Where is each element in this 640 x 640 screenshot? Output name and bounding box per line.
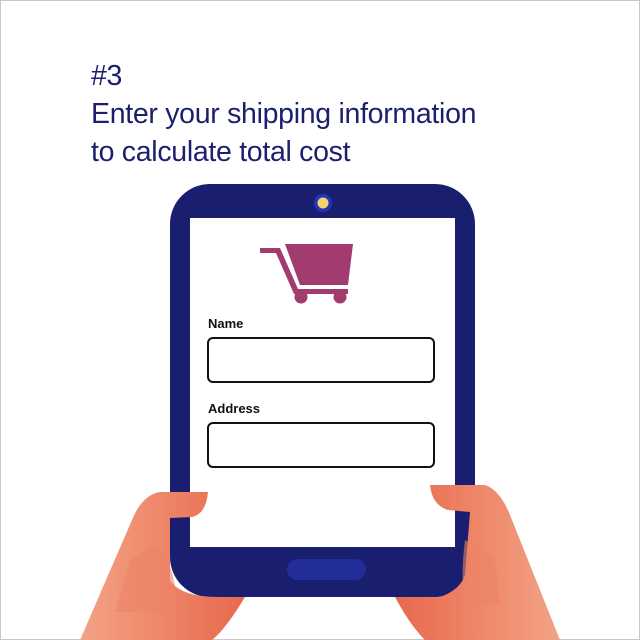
- title: Enter your shipping information: [91, 98, 476, 130]
- title: [91, 60, 476, 168]
- title: #3: [91, 60, 122, 92]
- form: address label: Address: [208, 401, 260, 416]
- title: to calculate total cost: [91, 136, 350, 168]
- form: address input: [207, 422, 435, 468]
- icon: shopping cart: [260, 244, 353, 304]
- tablet body: [170, 184, 475, 597]
- right hand: [395, 485, 560, 640]
- form: name label: Name: [208, 316, 243, 331]
- left hand: [80, 492, 245, 640]
- form: name input: [207, 337, 435, 383]
